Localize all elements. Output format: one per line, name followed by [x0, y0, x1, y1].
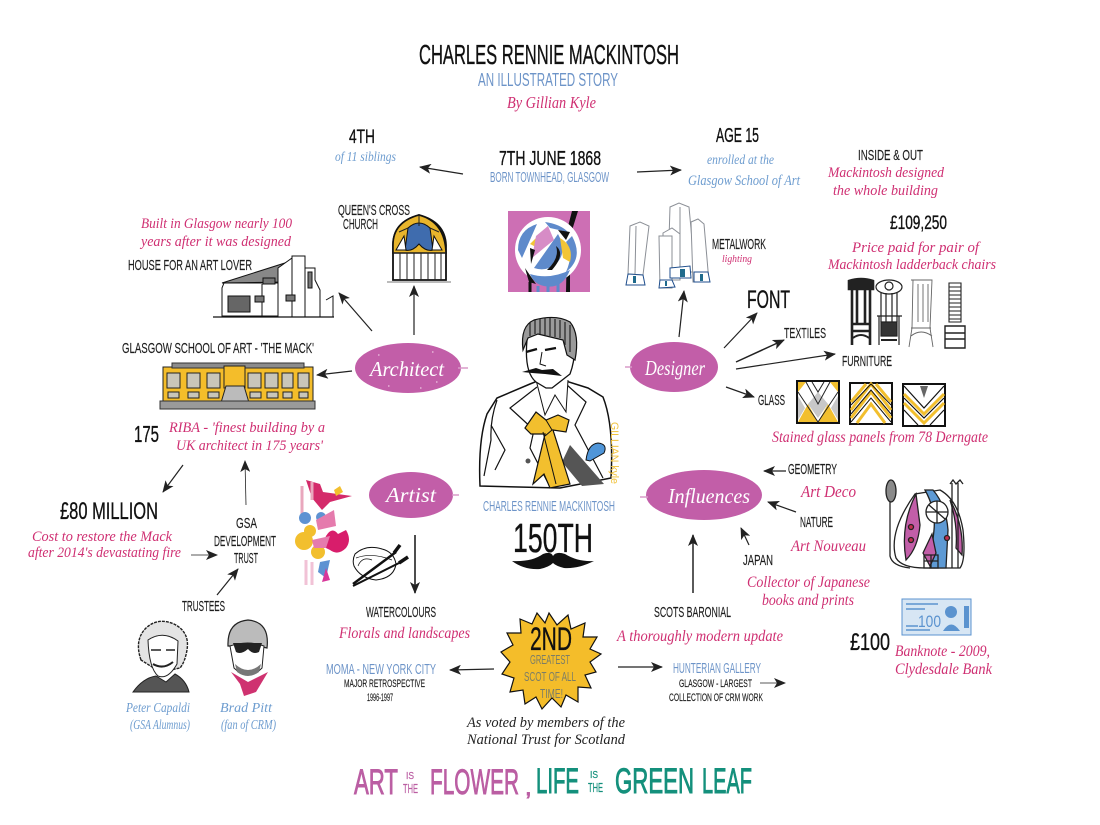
badge: 2nd greatest Scot: GREATEST	[530, 652, 570, 667]
arrow: birth to age 15	[637, 170, 681, 172]
fact: chair price: Price paid for pair of	[851, 240, 981, 256]
fact: MoMA: MAJOR RETROSPECTIVE	[344, 678, 425, 690]
author: By Gillian Kyle	[507, 93, 596, 112]
fact: birth date: 7TH JUNE 1868	[499, 148, 601, 170]
footer quote: IS	[406, 771, 414, 782]
label: metalwork: lighting	[722, 253, 752, 265]
influence: nature	[790, 514, 866, 555]
icon: house for an art lover drawing	[213, 256, 334, 317]
label: textiles: TEXTILES	[784, 325, 826, 342]
fact: 80 million	[28, 498, 181, 561]
badge: 2nd greatest Scot: 2ND	[530, 621, 572, 657]
panel 2	[850, 383, 892, 424]
caption: Peter Capaldi: (GSA Alumnus)	[130, 718, 190, 733]
fact: Hunterian Gallery: GLASGOW - LARGEST	[679, 678, 752, 690]
fact: MoMA: 1996-1997	[367, 692, 393, 704]
caption: Peter Capaldi: Peter Capaldi	[125, 701, 190, 716]
label: Glasgow School of Art: GLASGOW SCHOOL OF ART - 'THE MACK'	[122, 340, 314, 357]
bubble: Artist	[369, 472, 459, 518]
arrow: designer to metalwork	[679, 291, 684, 337]
bubble: Artist: Artist	[384, 483, 437, 507]
hair	[522, 317, 577, 360]
label: Charles Rennie Mackintosh: CHARLES RENNIE MACKINTOSH	[483, 498, 615, 515]
panel 1	[797, 381, 839, 423]
arrow: architect to house	[339, 293, 372, 331]
arrow: nature	[768, 502, 796, 512]
influence: Japan: JAPAN	[743, 552, 773, 569]
label: GSA Development Trust: DEVELOPMENT	[214, 533, 276, 550]
arrow: architect to school	[317, 371, 352, 375]
icon: Mackintosh rose square	[508, 211, 590, 292]
caption: Brad Pitt	[220, 701, 276, 733]
footer quote: THE	[403, 781, 418, 796]
arrow: artist to watercolours	[414, 535, 416, 593]
portrait: Brad Pitt	[228, 620, 268, 696]
pocket handkerchief	[586, 443, 605, 461]
arrow: trust to RIBA	[245, 461, 246, 505]
badge: 2nd greatest Scot	[501, 613, 601, 709]
label: trustees: TRUSTEES	[182, 598, 225, 615]
label: Queen's Cross Church: QUEEN'S CROSS	[338, 202, 410, 219]
influence: nature: Art Nouveau	[790, 538, 866, 555]
fact: chair price: Mackintosh ladderback chairs	[827, 257, 996, 273]
arrow: Japan	[741, 528, 749, 545]
arrow: designer to textiles	[736, 340, 784, 362]
arrow: geometry	[764, 470, 786, 472]
chair 3	[909, 280, 933, 347]
fact: inside and out: Mackintosh designed	[827, 165, 944, 181]
fact: chair price	[827, 213, 996, 273]
label: house for an art lover: HOUSE FOR AN ART LOVER	[128, 257, 252, 274]
label: metalwork: METALWORK	[712, 236, 766, 253]
fact: 100 pounds: Clydesdale Bank	[895, 661, 993, 678]
influence: geometry: Art Deco	[800, 482, 856, 501]
bubble: Architect: Architect	[368, 357, 445, 381]
fact: Scots Baronial	[616, 604, 783, 645]
fact: Hunterian Gallery: HUNTERIAN GALLERY	[673, 660, 761, 677]
portrait: Peter Capaldi	[133, 621, 189, 692]
influence: Japan	[743, 552, 870, 609]
icon: church stained glass window	[387, 215, 451, 282]
influence: Japan: Collector of Japanese	[747, 574, 870, 591]
fact: 80 million: £80 MILLION	[60, 498, 158, 525]
fact: watercolours	[338, 604, 470, 642]
heading: 150th: 150TH	[513, 515, 593, 561]
fact: Hunterian Gallery: COLLECTION OF CRM WORK	[669, 692, 763, 704]
bubble: Designer	[625, 342, 718, 392]
signature: gillian kyle: GILLIAN kyle	[608, 422, 620, 484]
bubble: Influences: Influences	[667, 484, 750, 508]
chair 1	[849, 279, 873, 345]
caption: Brad Pitt: (fan of CRM)	[221, 718, 276, 733]
fact: 175 years: RIBA - 'finest building by a	[168, 420, 325, 436]
arrow: trustees to trust	[217, 569, 238, 595]
icon: 100 pound banknote: 100	[918, 612, 941, 631]
arrow: star to MoMA	[450, 669, 494, 670]
icon: metalwork lighting	[626, 203, 710, 288]
fact: watercolours: WATERCOLOURS	[366, 604, 436, 621]
text: built in Glasgow	[139, 216, 292, 250]
bubble: Designer: Designer	[644, 356, 706, 380]
footer quote	[354, 762, 752, 802]
label: metalwork	[712, 236, 766, 265]
bow tie yellow	[525, 412, 570, 488]
icon: Glasgow School of Art building	[160, 363, 315, 409]
fact: chair price: £109,250	[890, 213, 947, 234]
label: Queen's Cross Church: CHURCH	[343, 216, 378, 233]
fact: 4th of 11 siblings	[335, 127, 396, 165]
badge: 2nd greatest Scot: SCOT OF ALL	[524, 669, 576, 684]
title block	[419, 39, 679, 112]
bubble: Architect	[355, 343, 468, 393]
fact: 80 million: Cost to restore the Mack	[32, 529, 172, 545]
caption: stained glass: Stained glass panels from 78 Derngate	[772, 429, 988, 446]
bubble: Influences	[640, 470, 762, 520]
text: built in Glasgow: years after it was designed	[139, 234, 291, 250]
fact: watercolours: Florals and landscapes	[338, 625, 470, 642]
fact: 80 million: after 2014's devastating fire	[28, 545, 181, 561]
text: voted by	[466, 715, 625, 748]
footer quote: ,	[525, 774, 532, 801]
influence: nature: NATURE	[800, 514, 833, 531]
fact: 100 pounds: £100	[850, 629, 890, 656]
label: GSA Development Trust: TRUST	[234, 550, 258, 567]
subtitle: AN ILLUSTRATED STORY	[478, 70, 618, 90]
fact: 175 years: UK architect in 175 years'	[176, 438, 324, 454]
badge: 2nd greatest Scot: TIME!	[540, 686, 563, 701]
fact: inside and out: INSIDE & OUT	[858, 147, 923, 164]
fact: 175 years	[134, 420, 325, 454]
fact: 100 pounds	[850, 629, 993, 678]
fact: Hunterian Gallery	[669, 660, 763, 704]
icon: Art Nouveau motif	[886, 480, 964, 568]
fact: inside and out: the whole building	[833, 183, 938, 199]
influence: geometry: GEOMETRY	[788, 461, 837, 478]
fact: inside and out	[827, 147, 944, 199]
portrait: Charles Rennie Mackintosh	[480, 317, 612, 488]
arrow: 175 to cost	[163, 465, 183, 492]
footer quote: THE	[588, 780, 603, 795]
chair 4	[945, 283, 965, 348]
face	[526, 325, 574, 388]
text: built in Glasgow: Built in Glasgow nearly 100	[141, 216, 292, 232]
footer quote: FLOWER	[430, 763, 519, 802]
fact: age 15: enrolled at the	[707, 153, 774, 168]
label: GSA Development Trust: GSA	[236, 515, 257, 532]
arrow: designer to glass	[726, 387, 754, 397]
influence: geometry	[788, 461, 856, 501]
arrow: Hunterian to banknote	[760, 682, 785, 684]
footer quote: IS	[590, 770, 598, 781]
fact: Scots Baronial: A thoroughly modern update	[616, 628, 783, 645]
footer quote: GREEN	[615, 762, 694, 801]
fact: MoMA	[326, 661, 436, 704]
fact: age 15: AGE 15	[716, 125, 759, 147]
fact: Scots Baronial: SCOTS BARONIAL	[654, 604, 731, 621]
moustache	[522, 368, 562, 376]
influence: Japan: books and prints	[762, 592, 854, 609]
caption: Brad Pitt: Brad Pitt	[220, 701, 273, 716]
label: Queen's Cross Church	[338, 202, 410, 233]
arrow: designer to font	[724, 313, 757, 348]
footer quote: ART	[354, 763, 398, 802]
icon: 100 pound banknote	[902, 599, 971, 635]
icon: four Mackintosh chairs	[849, 279, 965, 348]
fact: 4th of 11 siblings: of 11 siblings	[335, 150, 396, 165]
text: voted by: As voted by members of the	[466, 715, 625, 731]
caption: Peter Capaldi	[125, 701, 190, 733]
arrow: star to Hunterian	[618, 666, 662, 668]
icon: stained glass panels	[797, 381, 945, 426]
label: furniture: FURNITURE	[842, 353, 892, 370]
fact: 175 years: 175	[134, 421, 159, 447]
arrow: designer to furniture	[736, 354, 835, 369]
fact: 4th of 11 siblings: 4TH	[349, 127, 375, 148]
fact: birth date: BORN TOWNHEAD, GLASGOW	[490, 169, 609, 186]
label: GSA Development Trust	[214, 515, 276, 567]
text: voted by: National Trust for Scotland	[466, 732, 625, 748]
arrow: cost to trust	[191, 554, 217, 556]
arrow: Scots Baronial to Influences	[692, 535, 694, 593]
fact: MoMA: MOMA - NEW YORK CITY	[326, 661, 436, 678]
icon: palette and brushes	[353, 545, 408, 586]
panel 3	[903, 384, 945, 426]
main title: CHARLES RENNIE MACKINTOSH	[419, 39, 679, 70]
fact: birth date	[490, 148, 609, 186]
footer quote: LIFE	[536, 762, 579, 801]
fact: age 15: Glasgow School of Art	[688, 173, 801, 189]
jacket	[480, 376, 612, 488]
label: font: FONT	[747, 286, 790, 314]
icon: moustache	[512, 553, 594, 569]
label: glass: GLASS	[758, 392, 785, 409]
footer quote: LEAF	[702, 762, 752, 801]
icon: flowers watercolour	[295, 480, 352, 585]
neck and collar	[535, 376, 568, 415]
fact: age 15	[688, 125, 801, 189]
arrow: birth to siblings	[420, 167, 463, 174]
arrow: architect to church	[413, 286, 415, 335]
fact: 100 pounds: Banknote - 2009,	[895, 643, 990, 660]
chair 2	[876, 280, 902, 345]
